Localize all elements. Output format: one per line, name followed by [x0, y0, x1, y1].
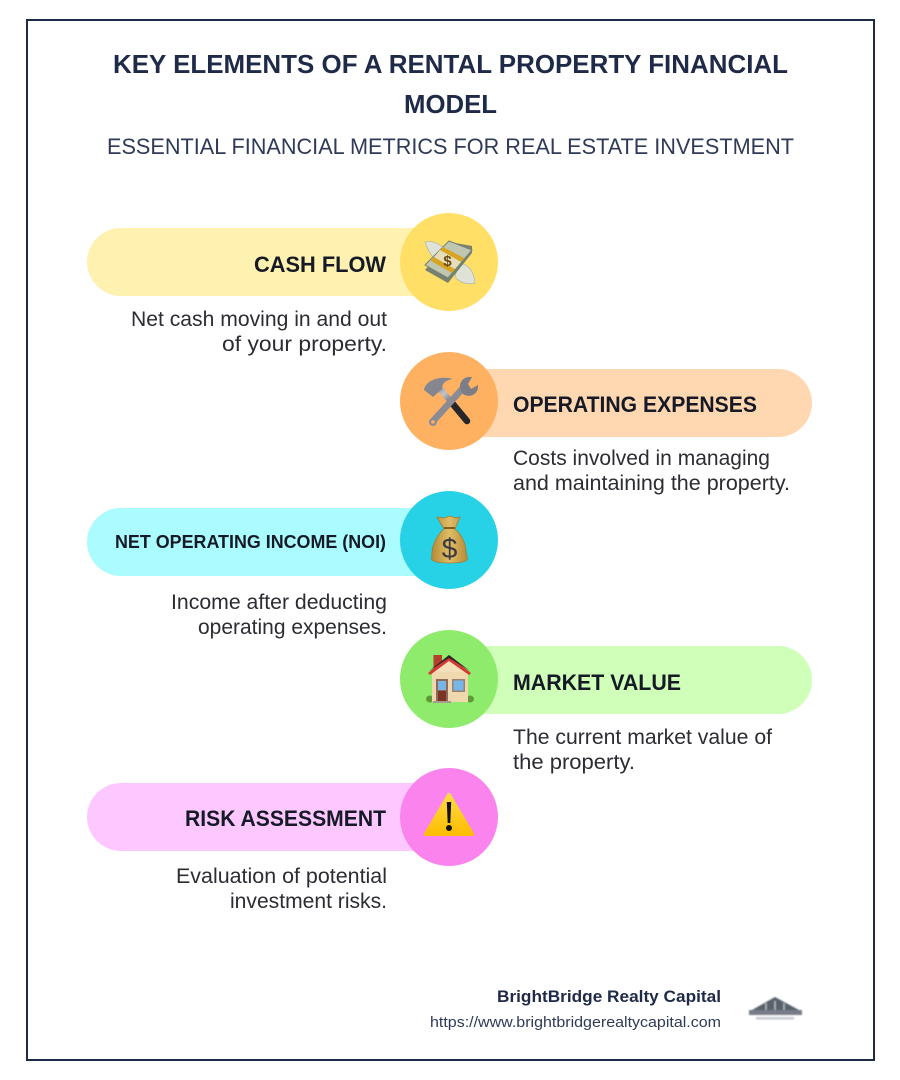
market value description: the property. — [513, 751, 635, 774]
risk assessment circle — [400, 768, 498, 866]
title: KEY ELEMENTS OF A RENTAL PROPERTY FINANCIAL — [113, 49, 788, 79]
panel: risk assessment — [87, 768, 498, 913]
market value pill — [460, 646, 812, 714]
title: MODEL — [404, 89, 497, 119]
market value description — [513, 726, 772, 774]
icon: money with wings — [425, 241, 475, 284]
icon: warning sign — [426, 795, 472, 834]
NOI heading: NET OPERATING INCOME (NOI) — [115, 532, 386, 552]
footer: website: https://www.brightbridgerealtycapital.com — [430, 1014, 721, 1031]
panel: net operating income — [87, 491, 498, 639]
operating expenses heading: OPERATING EXPENSES — [513, 392, 757, 417]
NOI circle — [400, 491, 498, 589]
NOI description: Income after deducting — [171, 591, 387, 614]
NOI pill — [87, 508, 440, 576]
panel: operating expenses — [400, 352, 812, 495]
footer: company name: BrightBridge Realty Capital — [497, 987, 721, 1006]
cash flow circle — [400, 213, 498, 311]
operating expenses description — [513, 447, 790, 495]
cash flow description — [131, 308, 387, 356]
NOI description: operating expenses. — [198, 616, 387, 639]
icon: hammer and wrench — [424, 377, 478, 426]
title — [113, 49, 788, 119]
cash flow pill — [87, 228, 440, 296]
panel: market value — [400, 630, 812, 774]
NOI description — [171, 591, 387, 639]
logo — [749, 997, 802, 1020]
risk assessment heading: RISK ASSESSMENT — [185, 806, 387, 831]
cash flow description: of your property. — [222, 333, 387, 356]
panel: cash flow — [87, 213, 498, 356]
operating expenses description: Costs involved in managing — [513, 447, 770, 470]
icon: money bag: $ — [442, 533, 458, 564]
subtitle: ESSENTIAL FINANCIAL METRICS FOR REAL ESTATE INVESTMENT — [107, 134, 794, 159]
risk assessment description: Evaluation of potential — [176, 865, 387, 888]
risk assessment pill — [87, 783, 440, 851]
icon: money bag — [432, 516, 467, 564]
icon: money with wings: $ — [443, 253, 452, 270]
cash flow description: Net cash moving in and out — [131, 308, 387, 331]
cash flow heading: CASH FLOW — [254, 252, 386, 277]
risk assessment description: investment risks. — [230, 890, 387, 913]
risk assessment description — [176, 865, 387, 913]
market value heading: MARKET VALUE — [513, 670, 681, 695]
icon: house — [426, 655, 474, 703]
operating expenses pill — [460, 369, 812, 437]
operating expenses description: and maintaining the property. — [513, 472, 790, 495]
market value description: The current market value of — [513, 726, 772, 749]
operating expenses circle — [400, 352, 498, 450]
market value circle — [400, 630, 498, 728]
